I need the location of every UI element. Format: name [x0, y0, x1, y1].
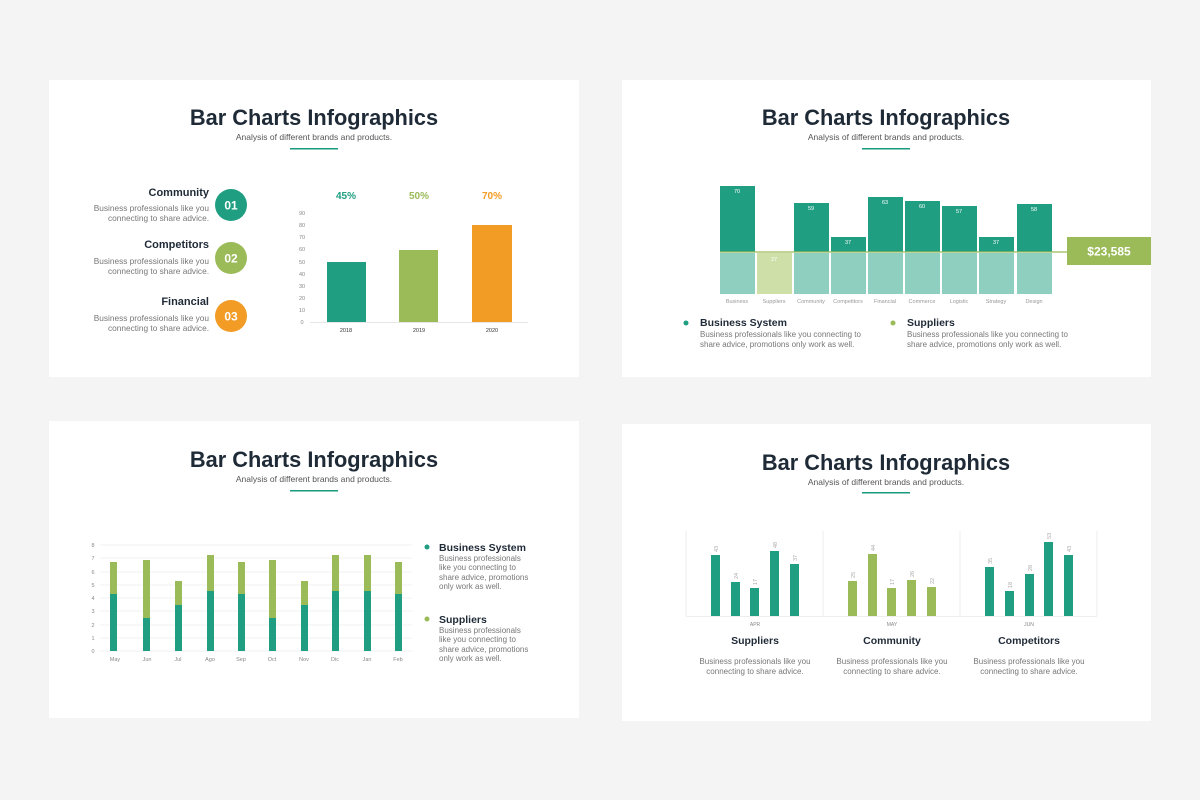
bar chart: yearly: 90 [299, 211, 305, 217]
bar chart: yearly: 70% [482, 191, 502, 202]
bar chart: categories: Logistic [950, 299, 969, 305]
panel: bottom-left stacked monthly bars [49, 421, 579, 718]
stacked bar chart: 3 [91, 609, 95, 615]
stacked bar chart: Feb [393, 657, 403, 663]
bar chart: yearly: 60 [299, 247, 305, 253]
bar chart: yearly: 10 [299, 308, 305, 314]
grouped bar chart: APR [750, 622, 761, 628]
icon: circle 03 [215, 300, 247, 332]
icon: circle 02: 02 [224, 252, 238, 266]
item: Competitors: connecting to share advice. [108, 266, 209, 276]
text block: Community: Community [863, 635, 921, 647]
legend: Suppliers: Business professionals [439, 626, 521, 635]
bar chart: categories: Design [1025, 299, 1043, 305]
legend: Business System: Business System [439, 542, 526, 554]
item: Financial: Business professionals like you [94, 313, 209, 323]
legend: Suppliers: only work as well. [439, 654, 502, 663]
icon: circle 03: 03 [224, 310, 238, 324]
subtitle: Analysis of different brands and products. [808, 477, 964, 487]
bar chart: yearly: 50 [299, 260, 305, 266]
grouped bar chart: 35 [988, 558, 994, 564]
bar chart: categories: 57 [956, 209, 962, 215]
item: Competitors: Competitors [144, 239, 209, 251]
bar chart: yearly: 2018 [340, 328, 352, 334]
subtitle: Analysis of different brands and products. [808, 132, 964, 142]
stacked bar chart: Dic [331, 657, 339, 663]
bar chart: categories: 37 [993, 240, 999, 246]
stacked bar chart: 8 [91, 543, 95, 549]
bar chart: yearly: 20 [299, 296, 305, 302]
bar chart: yearly: 2020 [486, 328, 498, 334]
legend: Suppliers: Suppliers [907, 317, 955, 329]
stacked bar chart: Jul [174, 657, 182, 663]
grouped bar chart: 43 [1067, 546, 1073, 552]
stacked bar chart: Ago [205, 657, 215, 663]
grouped bar chart: 22 [930, 578, 936, 584]
item: Financial: Financial [161, 296, 209, 308]
bar chart: categories: 58 [1031, 207, 1037, 213]
legend: Business System: share advice, promotions only work as well. [700, 340, 854, 349]
legend: Business System: Business professionals [439, 554, 521, 563]
legend: Suppliers: share advice, promotions only work as well. [907, 340, 1061, 349]
stacked bar chart: Oct [268, 657, 277, 663]
title: Bar Charts Infographics [762, 450, 1010, 475]
subtitle: Analysis of different brands and products. [236, 474, 392, 484]
icon: circle 02 [215, 242, 247, 274]
legend: Business System [684, 317, 862, 349]
bar chart: categories: Community [797, 299, 825, 305]
callout: total value: $23,585 [1087, 244, 1131, 258]
panel: top-left bar chart with numbered items [49, 80, 579, 377]
item: Financial: connecting to share advice. [108, 323, 209, 333]
text block: Suppliers: Suppliers [731, 635, 779, 647]
legend: Suppliers: like you connecting to [439, 635, 516, 644]
text block: Community: connecting to share advice. [843, 667, 941, 676]
bar chart: categories: Financial [874, 299, 896, 305]
bar chart: categories: 70 [734, 189, 740, 195]
legend: Suppliers: Business professionals like you connecting to [907, 330, 1069, 339]
bar chart: yearly: 30 [299, 284, 305, 290]
legend: Suppliers [890, 317, 1069, 349]
grouped bar chart: 37 [793, 555, 799, 561]
bar chart: categories [720, 186, 1067, 305]
stacked bar chart: 2 [91, 623, 95, 629]
bar chart: yearly: 0 [300, 320, 304, 326]
stacked bar chart: 6 [91, 570, 95, 576]
callout: total value [1067, 237, 1151, 265]
bar chart: categories: 63 [882, 200, 888, 206]
icon: circle 01: 01 [224, 198, 238, 212]
item: Financial [94, 296, 247, 333]
grouped bar chart: 28 [1028, 565, 1034, 571]
legend: Business System: like you connecting to [439, 563, 516, 572]
bar chart: yearly: 45% [336, 191, 356, 202]
item: Competitors: Business professionals like you [94, 256, 209, 266]
legend: Business System: Business System [700, 317, 787, 329]
stacked bar chart: 1 [91, 636, 95, 642]
stacked bar chart: Jan [363, 657, 371, 663]
text block: Suppliers: connecting to share advice. [706, 667, 804, 676]
bar chart: yearly: 80 [299, 223, 305, 229]
bar chart: yearly: 2019 [413, 328, 425, 334]
bar chart: yearly: 40 [299, 272, 305, 278]
bar chart: categories: Business [726, 299, 748, 305]
panel: bottom-right grouped monthly bars [622, 424, 1151, 721]
bar chart: categories: 37 [845, 240, 851, 246]
grouped bar chart: MAY [887, 622, 898, 628]
legend: Business System: only work as well. [439, 582, 502, 591]
stacked bar chart: Jun [143, 657, 151, 663]
legend: Suppliers [424, 614, 528, 663]
bar chart: yearly: 70 [299, 235, 305, 241]
item: Community: Community [148, 187, 210, 199]
stacked bar chart: 0 [91, 649, 95, 655]
text block: Suppliers: Business professionals like you [699, 657, 811, 666]
legend: Suppliers: share advice, promotions [439, 645, 528, 654]
item: Community: Business professionals like you [94, 203, 209, 213]
grouped bar chart: 18 [1008, 582, 1014, 588]
grouped bar chart: 17 [890, 579, 896, 585]
bar chart: categories: Commerce [909, 299, 935, 305]
legend: Business System [424, 542, 528, 591]
text block: Competitors: connecting to share advice. [980, 667, 1078, 676]
stacked bar chart [91, 543, 412, 663]
title: Bar Charts Infographics [190, 105, 438, 130]
stacked bar chart: Sep [236, 657, 246, 663]
item: Community: connecting to share advice. [108, 213, 209, 223]
legend: Suppliers: Suppliers [439, 614, 487, 626]
text block: Competitors: Business professionals like you [973, 657, 1085, 666]
item: Community [94, 187, 247, 223]
grouped bar chart: 53 [1047, 533, 1053, 539]
legend: Business System: Business professionals like you connecting to [700, 330, 862, 339]
panel: top-right category bar chart [622, 80, 1151, 377]
title: Bar Charts Infographics [190, 447, 438, 472]
grouped bar chart: 25 [851, 572, 857, 578]
bar chart: yearly [299, 191, 528, 334]
grouped bar chart [686, 531, 1097, 628]
title: Bar Charts Infographics [762, 105, 1010, 130]
bar chart: categories: Suppliers [763, 299, 786, 305]
bar chart: categories: Competitors [833, 299, 863, 305]
item: Competitors [94, 239, 247, 276]
grouped bar chart: JUN [1024, 622, 1034, 628]
text block: Competitors [973, 635, 1085, 676]
grouped bar chart: 43 [714, 546, 720, 552]
bar chart: categories: Strategy [986, 299, 1006, 305]
text block: Competitors: Competitors [998, 635, 1060, 647]
bar chart: categories: 60 [919, 204, 925, 210]
stacked bar chart: 7 [91, 556, 95, 562]
grouped bar chart: 24 [734, 573, 740, 579]
stacked bar chart: May [110, 657, 120, 663]
bar chart: categories: 59 [808, 206, 814, 212]
grouped bar chart: 44 [871, 545, 877, 551]
text block: Suppliers [699, 635, 811, 676]
text block: Community: Business professionals like you [836, 657, 948, 666]
icon: circle 01 [215, 189, 247, 221]
bar chart: yearly: 50% [409, 191, 429, 202]
bar chart: categories: 27 [771, 257, 777, 263]
grouped bar chart: 48 [773, 542, 779, 548]
legend: Business System: share advice, promotions [439, 573, 528, 582]
stacked bar chart: 5 [91, 583, 95, 589]
grouped bar chart: 26 [910, 571, 916, 577]
stacked bar chart: Nov [299, 657, 309, 663]
stacked bar chart: 4 [91, 596, 95, 602]
grouped bar chart: 17 [753, 579, 759, 585]
subtitle: Analysis of different brands and products. [236, 132, 392, 142]
text block: Community [836, 635, 948, 676]
